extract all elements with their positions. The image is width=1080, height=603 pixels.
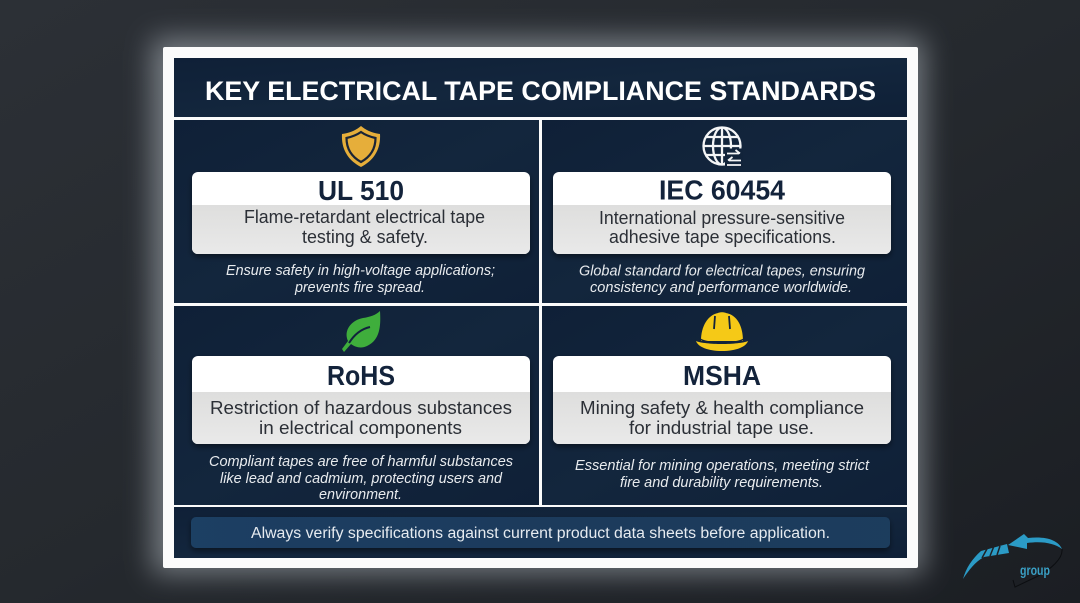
- icon: leaf: [342, 311, 380, 352]
- card: MSHA: for industrial tape use.: [629, 418, 814, 438]
- note: UL 510: Ensure safety in high-voltage applications;: [226, 263, 495, 279]
- note: RoHS: like lead and cadmium, protecting users and: [220, 471, 503, 487]
- title panel: [174, 58, 907, 117]
- arrows: [725, 148, 743, 168]
- logo: AIM group: group: [1020, 563, 1050, 578]
- card: MSHA: [553, 356, 891, 444]
- card: UL 510: UL 510: [318, 175, 404, 206]
- card: IEC 60454: IEC 60454: [659, 174, 785, 206]
- panel: RoHS: [174, 306, 539, 505]
- icon: globe with arrows: [704, 128, 743, 168]
- note: UL 510: [226, 263, 495, 296]
- icon: hard hat: [696, 312, 748, 351]
- note: MSHA: fire and durability requirements.: [620, 475, 823, 491]
- note: UL 510: prevents fire spread.: [294, 280, 425, 296]
- card: IEC 60454: International pressure-sensitive: [599, 208, 845, 228]
- card: MSHA: MSHA: [683, 360, 761, 391]
- panel: footer: [174, 507, 907, 558]
- panel: IEC 60454: [542, 120, 907, 303]
- card: IEC 60454: adhesive tape specifications.: [609, 227, 836, 247]
- footer note bar: Always verify specifications against current product data sheets before application.: [251, 525, 830, 542]
- card: UL 510: Flame-retardant electrical tape: [244, 207, 485, 227]
- note: IEC 60454: consistency and performance worldwide.: [590, 280, 852, 296]
- note: IEC 60454: [579, 264, 865, 296]
- footer note bar: [191, 517, 890, 548]
- card: RoHS: Restriction of hazardous substances: [210, 398, 512, 418]
- note: MSHA: Essential for mining operations, meeting strict: [575, 458, 870, 474]
- icon: shield: [342, 126, 380, 167]
- note: RoHS: [209, 454, 513, 503]
- note: RoHS: environment.: [319, 487, 402, 503]
- panel: UL 510: [174, 120, 539, 303]
- card: RoHS: [192, 356, 530, 444]
- card: UL 510: [192, 172, 530, 254]
- card: IEC 60454: [553, 172, 891, 254]
- title: KEY ELECTRICAL TAPE COMPLIANCE STANDARDS: [205, 76, 876, 106]
- card: UL 510: testing & safety.: [302, 227, 428, 247]
- note: MSHA: [575, 458, 870, 491]
- panel: MSHA: [542, 306, 907, 505]
- logo: AIM group: [963, 534, 1062, 587]
- note: RoHS: Compliant tapes are free of harmful substances: [209, 454, 513, 470]
- note: IEC 60454: Global standard for electrical tapes, ensuring: [579, 264, 865, 280]
- card: MSHA: Mining safety & health compliance: [580, 398, 864, 418]
- white glowing frame: [152, 38, 924, 574]
- card: RoHS: in electrical components: [259, 418, 462, 438]
- card: RoHS: RoHS: [327, 360, 395, 391]
